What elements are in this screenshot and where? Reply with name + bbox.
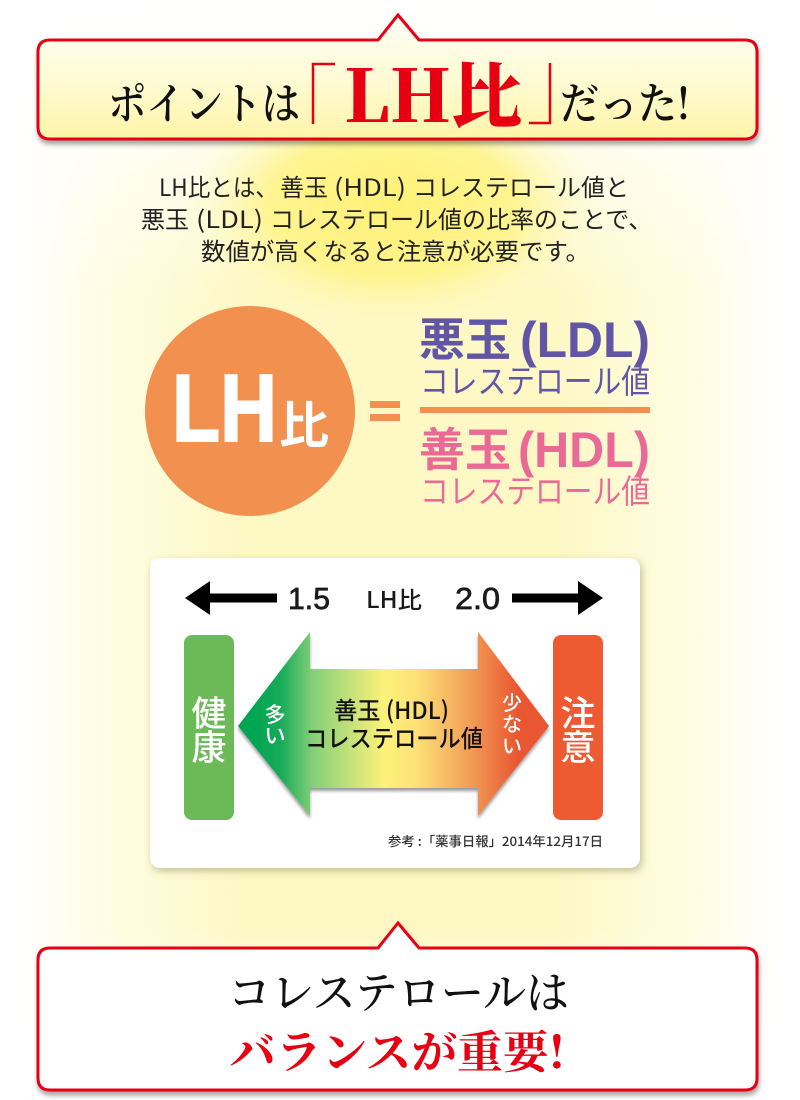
callout: bottom conclusion bubble <box>38 923 757 1090</box>
bubble shape <box>38 923 757 1090</box>
intro text: コレステロール値の比率のことで、 <box>270 200 652 235</box>
label: many <box>264 699 286 750</box>
label: few: 少 <box>502 687 522 716</box>
heading text <box>108 39 690 143</box>
formula <box>145 304 650 516</box>
arrow: right <box>512 581 603 615</box>
caution box: 注 <box>560 686 596 737</box>
intro text: LH比とは、 <box>159 168 278 203</box>
conclusion line 2: バランスが重要! <box>230 1016 565 1081</box>
LH ratio circle: 比 <box>279 386 329 458</box>
numerator: LDL: 悪玉 <box>419 304 511 370</box>
source note: 参考 :「薬事日報」2014年12月17日 <box>388 831 603 850</box>
label: few: い <box>502 730 522 759</box>
arrow: left <box>185 581 277 615</box>
equals sign <box>370 401 400 421</box>
health box <box>184 635 234 820</box>
scale labels: 2.0 <box>455 581 500 616</box>
label: few: な <box>502 708 522 737</box>
health box: 健 <box>191 686 227 737</box>
caution box: 意 <box>560 720 596 771</box>
arrow centre label: コレステロール値 <box>305 719 483 754</box>
numerator: LDL: (LDL) <box>520 312 650 368</box>
scale labels: 1.5 <box>288 581 330 616</box>
health box: 康 <box>191 720 227 771</box>
intro text: (HDL) <box>334 168 406 203</box>
caution box <box>553 635 603 820</box>
scale labels: LH比 <box>366 581 422 615</box>
scale labels <box>288 581 500 616</box>
denominator: HDL: コレステロール値 <box>420 465 650 513</box>
label: few <box>502 687 522 759</box>
intro text: (LDL) <box>196 200 263 235</box>
LH ratio circle: LH <box>172 355 277 462</box>
arrow centre label <box>305 691 483 754</box>
arrow centre label: 善玉 (HDL) <box>334 691 449 726</box>
fraction line <box>420 407 650 413</box>
intro text: 数値が高くなると注意が必要です。 <box>201 232 590 267</box>
heading text: LH比 <box>344 39 522 143</box>
conclusion line 1: コレステロールは <box>228 957 569 1021</box>
bubble shape <box>38 15 757 139</box>
intro text: コレステロール値と <box>413 168 629 203</box>
card background <box>150 558 640 868</box>
double-headed gradient arrow <box>238 632 549 816</box>
LH ratio circle <box>145 306 355 516</box>
intro text: 善玉 <box>280 168 328 203</box>
intro text: 悪玉 <box>141 200 189 235</box>
intro text <box>141 168 652 267</box>
heading text: ポイントは <box>108 68 300 132</box>
callout: top heading bubble <box>38 15 757 143</box>
label: many: 多 <box>264 699 286 729</box>
denominator: HDL: (HDL) <box>518 422 650 478</box>
panel: LH ratio scale card <box>150 558 640 868</box>
label: many: い <box>264 720 286 750</box>
numerator: LDL: コレステロール値 <box>420 355 650 403</box>
denominator: HDL <box>419 414 650 513</box>
numerator: LDL <box>419 304 650 403</box>
denominator: HDL: 善玉 <box>419 414 511 480</box>
heading text: だった! <box>560 68 690 132</box>
